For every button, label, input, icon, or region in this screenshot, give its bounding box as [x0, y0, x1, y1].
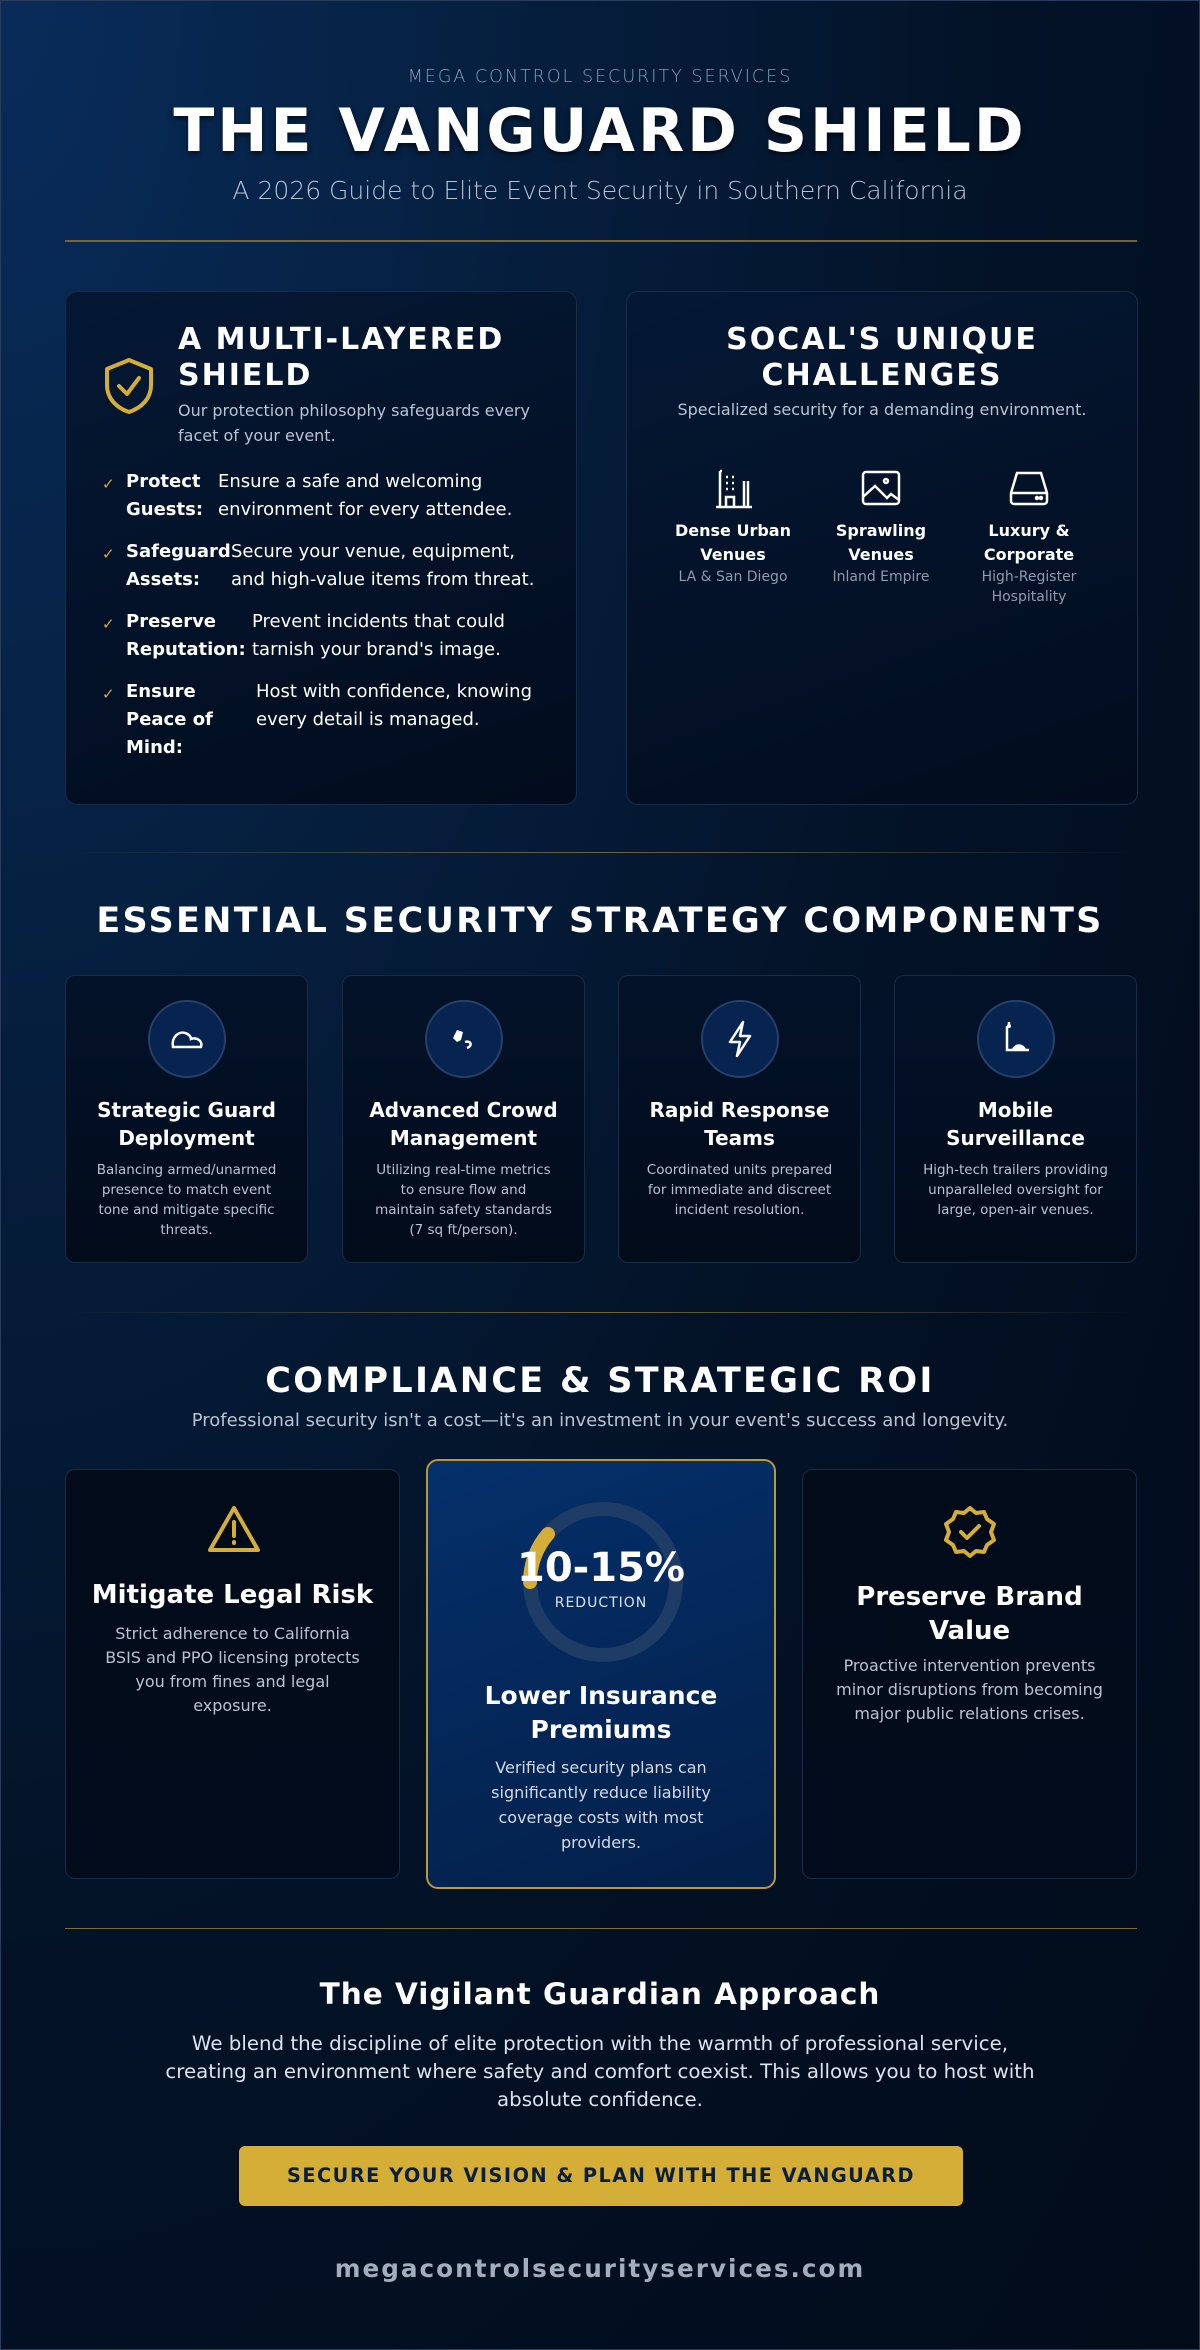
icon: bolt	[700, 1000, 778, 1078]
list: benefits: Ensure Peace of Mind:	[126, 681, 213, 758]
challenge: sprawling	[832, 470, 930, 585]
subtitle: A 2026 Guide to Elite Event Security in Southern California	[232, 176, 968, 205]
challenge: luxury: High-Register	[982, 569, 1076, 585]
button: call to action	[239, 2146, 963, 2206]
card: guard deployment: Strategic Guard	[97, 1098, 276, 1122]
icon: surveillance trailer	[976, 1000, 1054, 1078]
challenge: urban	[675, 470, 791, 585]
heading	[726, 322, 1038, 393]
card: guard deployment	[65, 975, 308, 1263]
heading: A MULTI-LAYERED	[178, 322, 504, 357]
brand eyebrow: MEGA CONTROL SECURITY SERVICES	[408, 67, 792, 87]
card: insurance premiums: 10-15%	[517, 1545, 685, 1591]
list: benefits: ✓	[102, 475, 115, 493]
card: brand value: Value	[929, 1616, 1010, 1646]
card: insurance premiums	[426, 1459, 776, 1889]
heading: SHIELD	[178, 358, 312, 393]
card: insurance premiums: REDUCTION	[555, 1595, 647, 1611]
subheading: compliance: Professional security isn't a cost—it's an investment in your event's success and longevity.	[192, 1410, 1008, 1431]
list: benefits: Ensure a safe and welcoming environment for every attendee.	[218, 471, 512, 520]
icon: warning	[208, 1506, 260, 1552]
panel: socal challenges	[626, 291, 1138, 805]
card: mobile surveillance: Surveillance	[946, 1126, 1085, 1150]
card: brand value: Proactive intervention prevents minor disruptions from becoming major public relations crises.	[836, 1656, 1103, 1723]
website url: megacontrolsecurityservices.com	[335, 2254, 865, 2283]
card: legal risk	[65, 1469, 400, 1879]
card: crowd management: Utilizing real-time metrics to ensure flow and maintain safety standards (7 sq ft/person).	[375, 1162, 552, 1238]
card: rapid response: Teams	[704, 1126, 775, 1150]
challenge: urban: Dense Urban	[675, 521, 791, 540]
title: THE VANGUARD SHIELD	[173, 96, 1027, 166]
list: benefits: Preserve Reputation:	[126, 611, 246, 660]
icon: helmet	[148, 1000, 226, 1078]
icon: crowd	[424, 1000, 502, 1078]
card: insurance premiums: Premiums	[531, 1715, 671, 1744]
icon: shield check	[105, 358, 153, 414]
panel: multi-layered shield	[65, 291, 577, 805]
list: benefits: ✓	[102, 545, 115, 563]
card: brand value	[802, 1469, 1137, 1879]
card: rapid response: Rapid Response	[650, 1098, 829, 1122]
heading: compliance: COMPLIANCE & STRATEGIC ROI	[265, 1361, 935, 1401]
challenge: luxury: Corporate	[984, 545, 1074, 564]
heading: components: ESSENTIAL SECURITY STRATEGY COMPONENTS	[96, 901, 1104, 941]
list: benefits: Protect Guests:	[126, 471, 203, 520]
list: benefits: Secure your venue, equipment, and high-value items from threat.	[231, 541, 534, 590]
icon: badge check	[944, 1506, 996, 1558]
button: call to action: SECURE YOUR VISION & PLAN WITH THE VANGUARD	[287, 2164, 915, 2187]
card: brand value: Preserve Brand	[856, 1582, 1083, 1612]
challenge: urban: Venues	[700, 545, 766, 564]
card: insurance premiums: Lower Insurance	[485, 1681, 717, 1710]
list: benefits	[102, 471, 534, 758]
list: benefits: Safeguard Assets:	[126, 541, 231, 590]
card: legal risk: Strict adherence to California BSIS and PPO licensing protects you from fines and legal exposure.	[105, 1624, 360, 1715]
card: crowd management: Management	[390, 1126, 537, 1150]
closing paragraph: We blend the discipline of elite protection with the warmth of professional service, creating an environment where safety and comfort coexist. This allows you to host with absolute confidence.	[165, 2032, 1035, 2111]
card: guard deployment: Deployment	[118, 1126, 255, 1150]
card: insurance premiums: Verified security plans can significantly reduce liability coverage costs with most providers.	[491, 1758, 711, 1852]
list: benefits: ✓	[102, 615, 115, 633]
list: benefits: Host with confidence, knowing every detail is managed.	[256, 681, 532, 730]
subheading: Specialized security for a demanding environment.	[677, 400, 1087, 419]
card: mobile surveillance	[894, 975, 1137, 1263]
card: rapid response: Coordinated units prepared for immediate and discreet incident resolution.	[647, 1162, 832, 1218]
list: benefits: ✓	[102, 685, 115, 703]
intro text: Our protection philosophy safeguards every facet of your event.	[178, 401, 530, 445]
card: guard deployment: Balancing armed/unarmed presence to match event tone and mitigate specific threats.	[97, 1162, 276, 1238]
heading: vigilant guardian: The Vigilant Guardian Approach	[320, 1977, 880, 2011]
list: benefits: Prevent incidents that could tarnish your brand's image.	[252, 611, 505, 660]
challenge: urban: LA & San Diego	[678, 569, 788, 585]
heading: SOCAL'S UNIQUE	[726, 322, 1038, 357]
card: crowd management: Advanced Crowd	[369, 1098, 558, 1122]
challenge: luxury: Hospitality	[992, 589, 1066, 605]
card: legal risk: Mitigate Legal Risk	[92, 1580, 373, 1610]
challenge: sprawling: Venues	[848, 545, 914, 564]
card: mobile surveillance: Mobile	[978, 1098, 1053, 1122]
challenge: luxury: Luxury &	[988, 521, 1070, 540]
chart: reduction ring	[523, 1502, 683, 1662]
challenge: sprawling: Sprawling	[836, 521, 926, 540]
challenge: luxury	[982, 472, 1076, 605]
challenge: sprawling: Inland Empire	[832, 569, 930, 585]
heading	[178, 322, 504, 393]
card: crowd management	[342, 975, 585, 1263]
heading: CHALLENGES	[762, 358, 1002, 393]
card: rapid response	[618, 975, 861, 1263]
card: mobile surveillance: High-tech trailers providing unparalleled oversight for large, open-air venues.	[923, 1162, 1108, 1218]
